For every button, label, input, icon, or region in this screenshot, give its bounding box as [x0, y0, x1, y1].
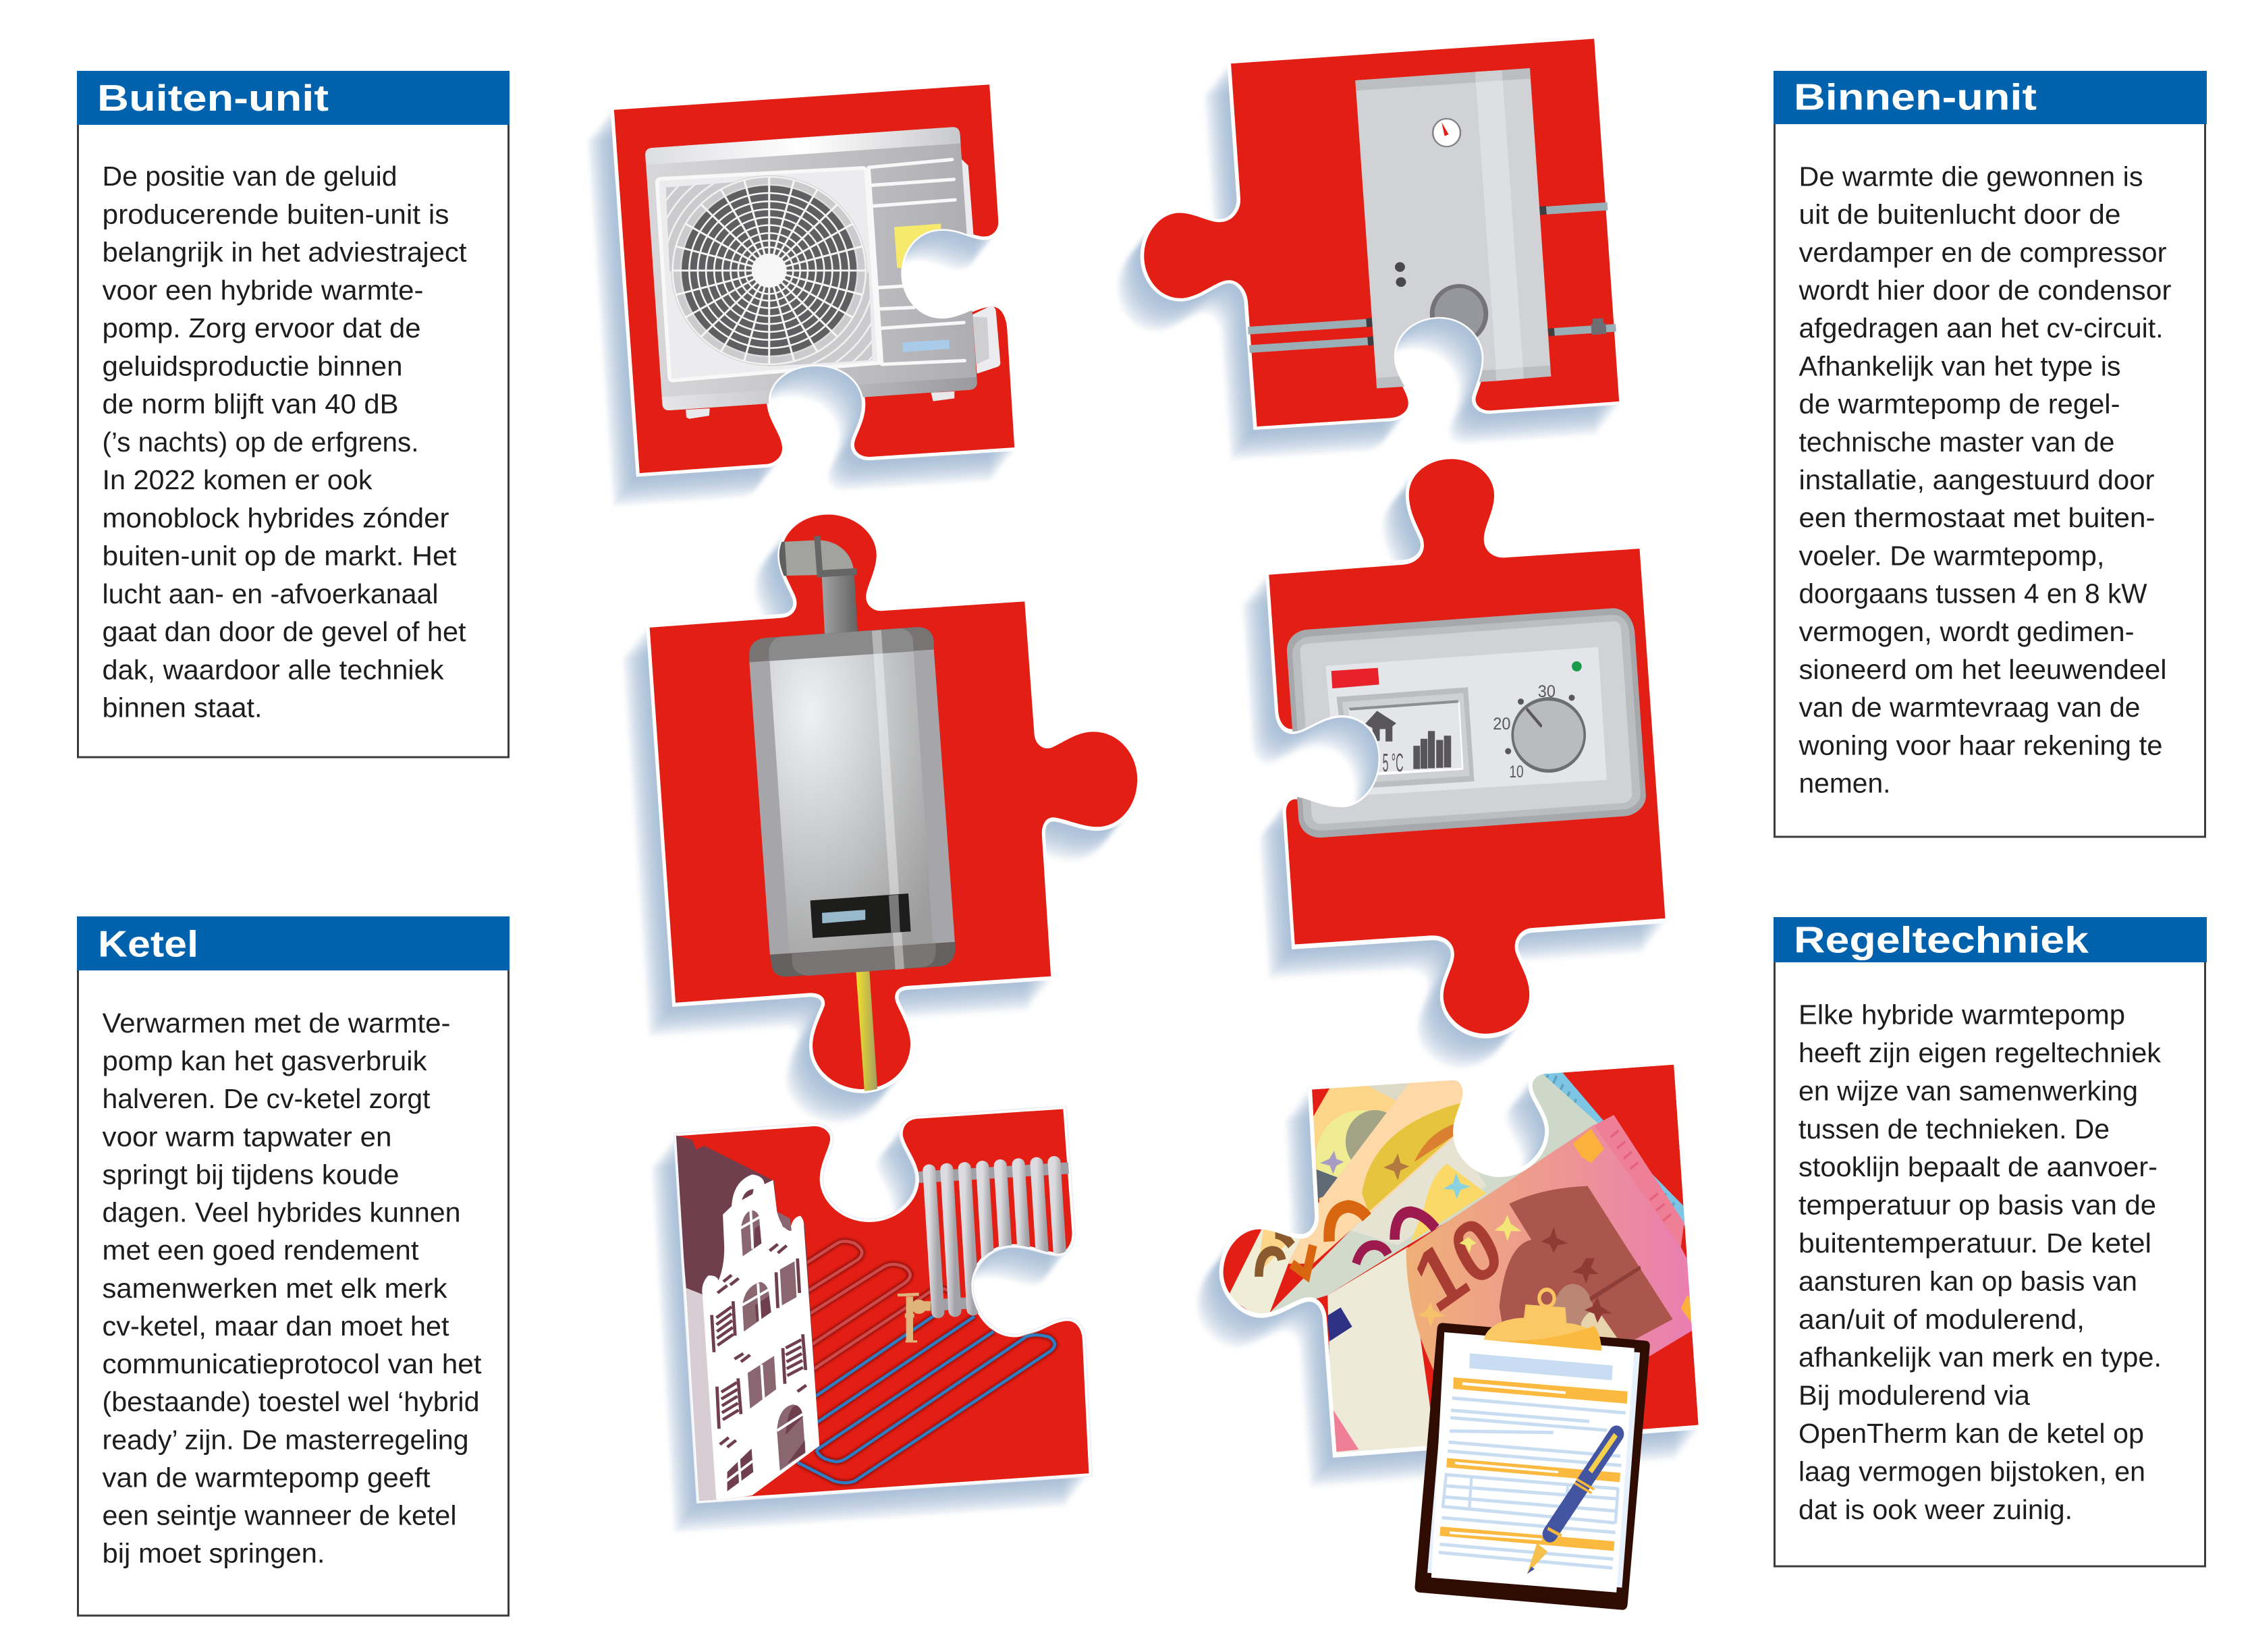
panel: Buiten-unit: De positie van de geluid: [103, 161, 397, 192]
panel: Buiten-unit: binnen staat.: [103, 692, 262, 723]
panel: Binnen-unit: uit de buitenlucht door de: [1799, 199, 2120, 230]
panel: Binnen-unit: een thermostaat met buiten-: [1799, 502, 2155, 533]
panel: Ketel: dagen. Veel hybrides kunnen: [103, 1197, 460, 1228]
panel: Ketel: cv-ketel, maar dan moet het: [103, 1311, 449, 1342]
panel: Regeltechniek: OpenTherm kan de ketel op: [1798, 1418, 2144, 1449]
panel: Regeltechniek: tussen de technieken. De: [1798, 1113, 2110, 1145]
puzzle piece: banknotes: [1197, 1062, 1701, 1610]
panel: Ketel: een seintje wanneer de ketel: [103, 1500, 456, 1531]
puzzle piece: thermostat: 5 °C: [1383, 748, 1404, 777]
panel: Binnen-unit: [1774, 71, 2207, 837]
puzzle piece: thermostat: 30: [1538, 682, 1556, 701]
puzzle piece: thermostat: 10: [1509, 762, 1524, 781]
panel: Buiten-unit: In 2022 komen er ook: [103, 464, 373, 495]
panel: Buiten-unit: belangrijk in het adviestraject: [103, 236, 467, 267]
puzzle piece: outdoor unit: [588, 83, 1016, 506]
panel: Ketel: [77, 916, 510, 1616]
panel: Regeltechniek: heeft zijn eigen regeltechniek: [1798, 1037, 2162, 1068]
panel: Buiten-unit: [77, 71, 510, 757]
panel: Regeltechniek: dat is ook weer zuinig.: [1798, 1494, 2072, 1525]
panel: Buiten-unit: pomp. Zorg ervoor dat de: [103, 312, 421, 343]
puzzle piece: boiler: [624, 513, 1139, 1122]
panel: Ketel: met een goed rendement: [103, 1235, 419, 1266]
panel: Binnen-unit: vermogen, wordt gedimen-: [1799, 616, 2134, 647]
clipboard with form and pen: [1415, 1290, 1650, 1610]
panel: Binnen-unit: Binnen-unit: [1794, 76, 2037, 117]
panel: Regeltechniek: stooklijn bepaalt de aanvoer-: [1798, 1151, 2158, 1182]
panel: Buiten-unit: monoblock hybrides zónder: [103, 502, 449, 533]
panel: Ketel: communicatieprotocol van het: [103, 1348, 482, 1379]
panel: Buiten-unit: de norm blijft van 40 dB: [103, 389, 398, 420]
panel: Ketel: samenwerken met elk merk: [103, 1273, 447, 1304]
panel: Regeltechniek: afhankelijk van merk en type.: [1798, 1342, 2162, 1373]
panel: Buiten-unit: dak, waardoor alle techniek: [103, 654, 444, 685]
puzzle piece: indoor unit: [1118, 37, 1631, 459]
puzzle piece: house with floor heating and radiator: [652, 1108, 1090, 1532]
panel: Ketel: voor warm tapwater en: [103, 1121, 391, 1152]
panel: Binnen-unit: sioneerd om het leeuwendeel: [1799, 654, 2166, 685]
panel: Ketel: van de warmtepomp geeft: [103, 1462, 431, 1493]
panel: Regeltechniek: buitentemperatuur. De ketel: [1798, 1228, 2151, 1259]
panel: Buiten-unit: lucht aan- en -afvoerkanaal: [103, 578, 439, 609]
panel: Regeltechniek: temperatuur op basis van de: [1798, 1190, 2156, 1221]
panel: Buiten-unit: producerende buiten-unit is: [103, 198, 449, 229]
panel: Binnen-unit: voeler. De warmtepomp,: [1799, 540, 2104, 571]
panel: Binnen-unit: doorgaans tussen 4 en 8 kW: [1799, 578, 2147, 609]
panel: Buiten-unit: Buiten-unit: [97, 77, 329, 119]
panel: Ketel: (bestaande) toestel wel ‘hybrid: [103, 1386, 479, 1417]
panel: Buiten-unit: gaat dan door de gevel of het: [103, 616, 466, 647]
panel: Binnen-unit: technische master van de: [1799, 426, 2115, 458]
panel: Buiten-unit: voor een hybride warmte-: [103, 275, 424, 306]
puzzle piece: thermostat: 20: [1493, 714, 1510, 734]
panel: Buiten-unit: geluidsproductie binnen: [103, 350, 402, 381]
panel: Ketel: Ketel: [98, 923, 198, 965]
panel: Binnen-unit: installatie, aangestuurd door: [1799, 464, 2154, 495]
panel: Ketel: pomp kan het gasverbruik: [103, 1045, 427, 1076]
panel: Regeltechniek: aan/uit of modulerend,: [1798, 1304, 2085, 1335]
panel: Ketel: ready’ zijn. De masterregeling: [103, 1424, 468, 1455]
panel: Regeltechniek: laag vermogen bijstoken, en: [1798, 1456, 2145, 1487]
puzzle piece: thermostat: [1243, 457, 1667, 1067]
panel: Regeltechniek: Regeltechniek: [1794, 918, 2089, 960]
panel: Regeltechniek: aansturen kan op basis van: [1798, 1265, 2137, 1296]
panel: Binnen-unit: afgedragen aan het cv-circuit.: [1799, 312, 2164, 343]
panel: Binnen-unit: van de warmtevraag van de: [1799, 692, 2141, 723]
panel: Regeltechniek: Elke hybride warmtepomp: [1798, 999, 2125, 1030]
panel: Binnen-unit: wordt hier door de condensor: [1798, 275, 2172, 306]
panel: Binnen-unit: De warmte die gewonnen is: [1799, 161, 2143, 192]
panel: Regeltechniek: en wijze van samenwerking: [1798, 1075, 2138, 1106]
panel: Regeltechniek: Bij modulerend via: [1798, 1380, 2030, 1411]
panel: Buiten-unit: buiten-unit op de markt. Het: [103, 541, 457, 572]
panel: Ketel: Verwarmen met de warmte-: [103, 1008, 451, 1039]
panel: Regeltechniek: [1774, 917, 2207, 1566]
panel: Ketel: springt bij tijdens koude: [103, 1159, 400, 1190]
panel: Buiten-unit: (’s nachts) op de erfgrens.: [103, 426, 418, 458]
panel: Binnen-unit: Afhankelijk van het type is: [1799, 350, 2120, 381]
panel: Ketel: bij moet springen.: [103, 1538, 325, 1569]
panel: Binnen-unit: woning voor haar rekening te: [1798, 729, 2162, 761]
puzzle piece: banknotes: 10: [1399, 1196, 1517, 1330]
panel: Ketel: halveren. De cv-ketel zorgt: [103, 1083, 431, 1114]
panel: Binnen-unit: verdamper en de compressor: [1799, 237, 2166, 268]
panel: Binnen-unit: nemen.: [1799, 768, 1891, 799]
panel: Binnen-unit: de warmtepomp de regel-: [1799, 389, 2120, 420]
